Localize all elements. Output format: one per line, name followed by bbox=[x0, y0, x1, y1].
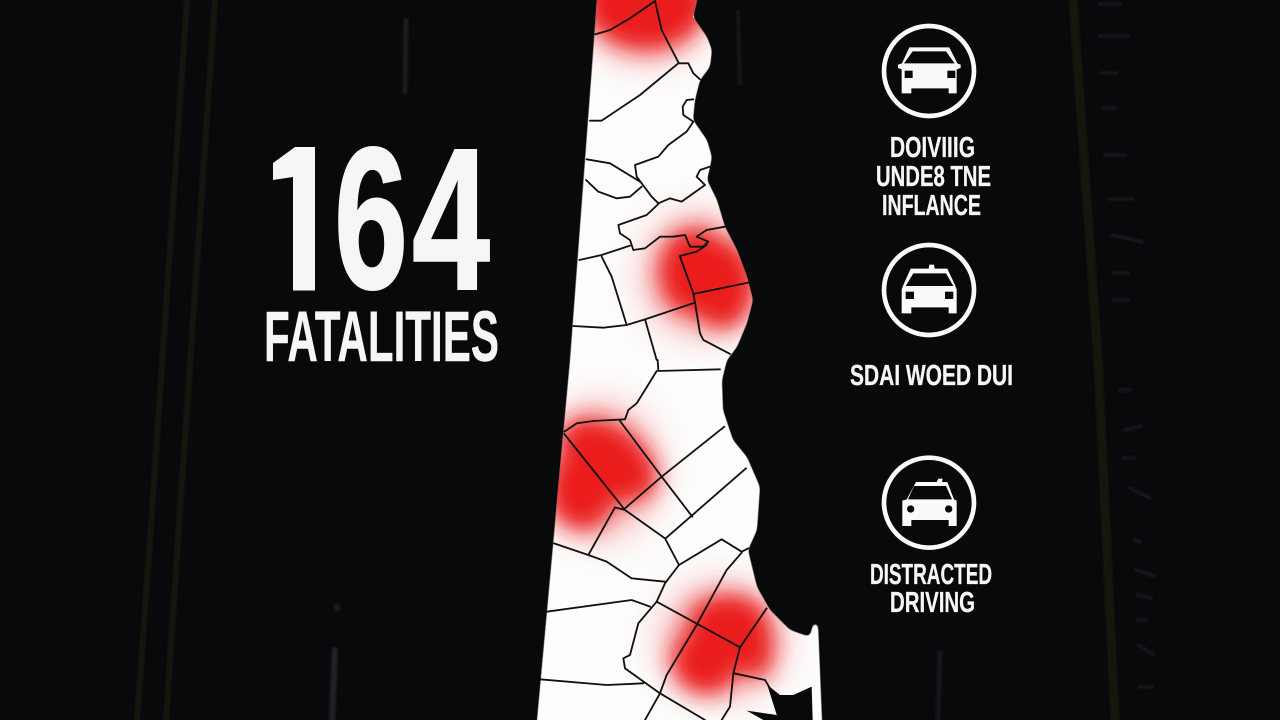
label: UNDE8 TNE bbox=[876, 161, 991, 193]
county borders, upper bbox=[573, 1, 748, 360]
label: INFLANCE bbox=[882, 190, 981, 222]
icon: taxi in circle bbox=[884, 245, 974, 335]
item: distracted driving bbox=[870, 458, 992, 619]
label: DOIVIIIG bbox=[890, 132, 975, 164]
map land shape bbox=[536, 0, 823, 720]
label: DRIVING bbox=[890, 587, 975, 619]
county borders, lower bbox=[540, 360, 770, 720]
item: SDAI WOED DUI bbox=[850, 245, 1013, 392]
dark bay cut-out bbox=[747, 685, 813, 720]
icon: taxi in circle bbox=[884, 458, 974, 548]
label: DISTRACTED bbox=[870, 559, 992, 591]
label bbox=[876, 132, 991, 222]
icon: car in circle bbox=[884, 26, 974, 116]
label: FATALITIES: FATALITIES bbox=[264, 298, 499, 377]
big number: 164: 6 bbox=[334, 105, 408, 331]
big number: 164: 4 bbox=[412, 106, 490, 332]
label: SDAI WOED DUI bbox=[850, 360, 1013, 392]
label bbox=[870, 559, 992, 619]
big number: 164: 1 bbox=[272, 106, 332, 332]
heat zones bbox=[544, 0, 782, 696]
map of counties with fatality heat zones bbox=[536, 0, 823, 720]
item: driving under the influence bbox=[876, 26, 991, 222]
big number: 164 bbox=[262, 105, 490, 332]
